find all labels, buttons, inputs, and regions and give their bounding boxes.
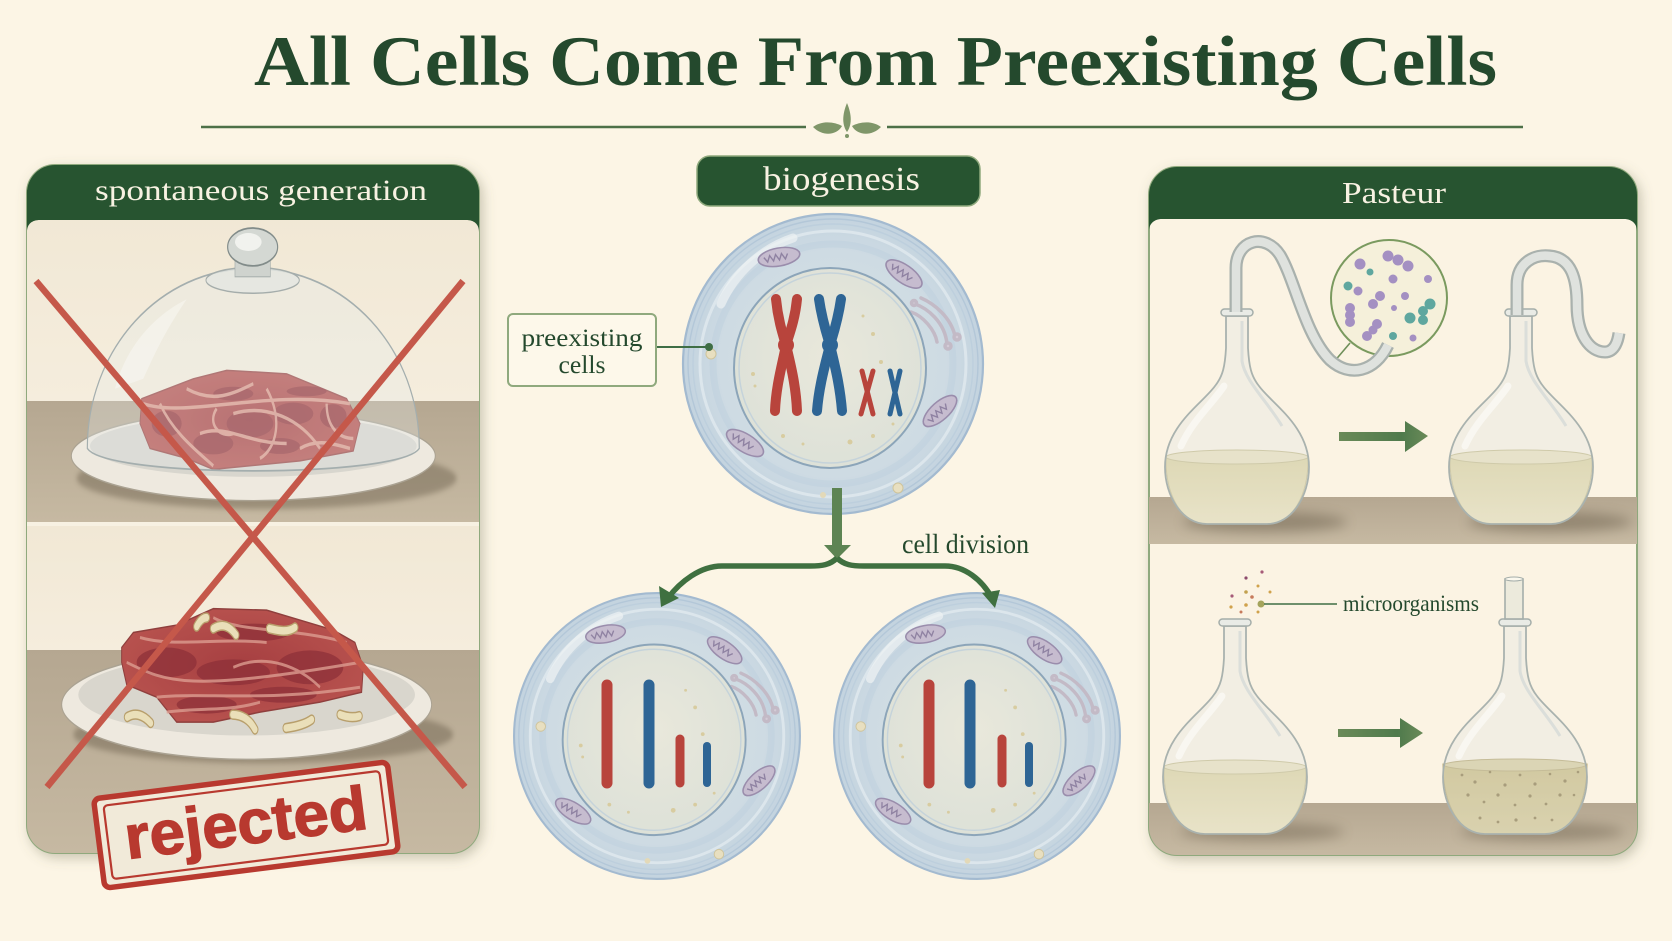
- heading badge: biogenesis: biogenesis: [763, 161, 920, 198]
- stamp: rejected: rejected: [120, 774, 371, 873]
- panel: spontaneous generation: [27, 165, 479, 888]
- magnified microbes inset: [1331, 240, 1447, 363]
- daughter cell: right: [834, 593, 1120, 879]
- title divider with leaf ornament: [201, 103, 1523, 138]
- callout: preexisting cells: [508, 314, 713, 386]
- scene backgrounds: [27, 165, 479, 853]
- callout: preexisting cells: cells: [558, 352, 606, 379]
- flask 2: swan neck stays clear: [1449, 256, 1632, 532]
- illustration: meat under glass dome: [71, 228, 457, 509]
- arrow: bottom row: [1338, 718, 1423, 748]
- callout: preexisting cells: preexisting: [522, 325, 643, 352]
- arrow: division into two daughter cells: [659, 488, 1000, 608]
- heading badge: biogenesis: [697, 156, 980, 206]
- flask 4: cloudy broth with microbial growth: [1443, 577, 1624, 841]
- panel heading: Pasteur: Pasteur: [1342, 175, 1447, 210]
- panel: Pasteur: [1149, 167, 1637, 855]
- scene backgrounds: [1149, 167, 1637, 855]
- stamp: rejected: [94, 762, 398, 888]
- duplicated chromosomes: [775, 299, 900, 414]
- panel heading: spontaneous generation: spontaneous generation: [95, 174, 427, 207]
- panel card: [1149, 167, 1637, 855]
- panel: biogenesis: [508, 156, 1120, 879]
- flask 3: open neck exposed to microorganisms: [1163, 619, 1344, 841]
- airborne microorganisms: [1229, 570, 1272, 614]
- illustration: meat with maggots on plate: [62, 609, 453, 763]
- title: All Cells Come From Preexisting Cells: [254, 23, 1497, 101]
- label: microorganisms: microorganisms: [1343, 591, 1479, 616]
- parent cell: [683, 214, 983, 514]
- label: cell division: cell division: [902, 529, 1029, 559]
- panel card: [27, 165, 479, 853]
- flask 1: swan neck with trapped microbes: [1165, 242, 1388, 532]
- arrow: top row: [1339, 421, 1428, 452]
- red X: rejected: [36, 281, 465, 787]
- daughter cell: left: [514, 593, 800, 879]
